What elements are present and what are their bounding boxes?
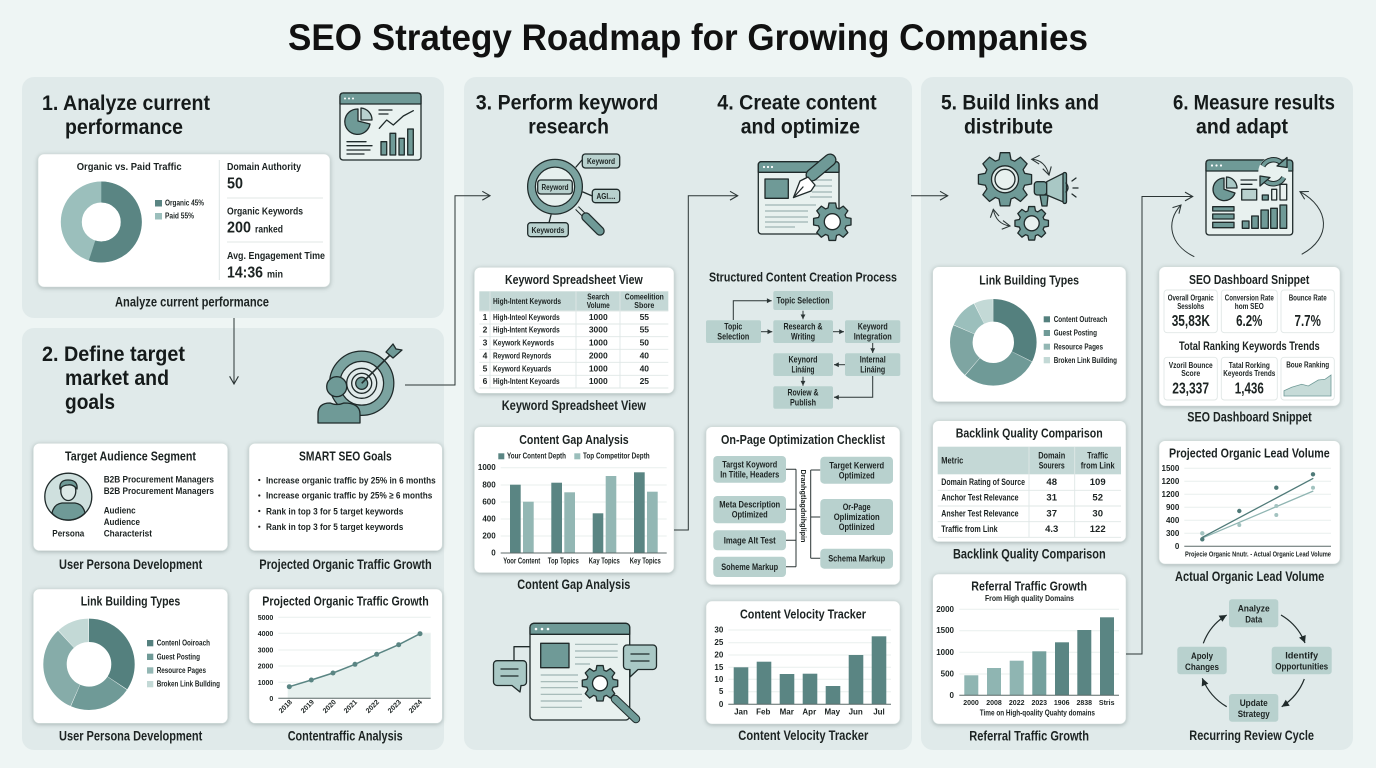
caption: backlink quality comparison: Backlink Quality Comparison	[953, 546, 1106, 561]
diagram: recurring review cycle: Identify	[1285, 651, 1319, 662]
card: keyword spreadsheet table: Comeelition	[625, 291, 664, 301]
card: backlink quality comparison table: Sourers	[1039, 460, 1065, 471]
card: SEO dashboard snippet: Keyeords Trends	[1223, 369, 1276, 378]
heading: step 1: performance	[65, 115, 183, 139]
metrics list: 200	[227, 220, 251, 237]
card: referral traffic growth bar chart	[933, 574, 1126, 724]
arrow: step 1 to step 2	[233, 318, 235, 384]
card: backlink quality comparison table: 122	[1090, 524, 1106, 535]
card: content velocity tracker bar chart: 0	[719, 700, 724, 709]
card: SEO dashboard snippet: 6.2%	[1236, 313, 1263, 330]
caption: content gap analysis: Content Gap Analysis	[517, 577, 630, 592]
card: keyword spreadsheet table: Keyword Spreadsheet View	[505, 272, 643, 287]
card: projected organic lead volume scatter chart: 1200	[1162, 477, 1180, 486]
card: backlink quality comparison table: Anchor Test Relevance	[941, 493, 1019, 504]
icon: magnifier with keyword tags: Keyword	[587, 157, 615, 166]
heading: step 4	[717, 90, 877, 138]
heading: step 5	[941, 90, 1099, 138]
card: SEO dashboard snippet: Total Ranking Keywords Trends	[1179, 339, 1320, 353]
card: link building types donut: Link Building Types	[979, 272, 1079, 287]
card: target audience segment	[33, 443, 228, 551]
card: keyword spreadsheet table: Volume	[587, 300, 610, 310]
card: referral traffic growth bar chart: 1906	[1054, 700, 1070, 707]
card: backlink quality comparison table: 37	[1046, 508, 1057, 519]
legend: link building types	[1044, 315, 1117, 365]
icon: dashboard with refresh cycle	[1172, 157, 1323, 257]
flow: structured content creation process: Selection	[717, 331, 749, 342]
chart: link building donut	[961, 310, 1025, 374]
card: keyword spreadsheet table: 1	[483, 312, 488, 322]
icon: web page with fountain pen and gear	[758, 160, 851, 240]
caption: recurring review cycle: Recurring Review Cycle	[1189, 728, 1314, 743]
legend: organic and paid: Organic 45%	[165, 199, 204, 208]
heading: step 3: research	[528, 114, 609, 138]
legend: link building types: Broken Link Bullding	[157, 680, 220, 689]
arrow: step 4 to step 5	[911, 195, 948, 197]
card: content velocity tracker bar chart: Jul	[873, 707, 885, 716]
heading: step 1	[42, 91, 210, 139]
panel: steps 5 and 6	[921, 77, 1353, 750]
caption: keyword spreadsheet view: Keyword Spreadsheet View	[502, 398, 646, 413]
card: keyword spreadsheet table: High-Intent Keyoards	[493, 376, 560, 386]
card: projected organic traffic growth line chart	[249, 589, 442, 723]
card: projected organic traffic growth line chart: 2023	[387, 699, 403, 715]
card: referral traffic growth bar chart: 2000	[963, 700, 979, 707]
card: content velocity tracker bar chart: Mar	[780, 707, 794, 716]
card: target audience segment: Target Audience Segment	[65, 449, 197, 464]
card: on-page optimization checklist: Or-Page	[843, 502, 871, 513]
legend: organic and paid: Paid 55%	[165, 212, 194, 220]
card: projected organic lead volume scatter chart: 300	[1166, 529, 1180, 538]
card: backlink quality comparison table: Ansher Test Relevance	[941, 508, 1019, 519]
flow: structured content creation process: Writing	[791, 331, 815, 342]
card: keyword spreadsheet table: 40	[640, 363, 649, 373]
card: link building types donut	[33, 589, 228, 723]
flow: structured content creation process: Lináing	[792, 364, 815, 375]
heading: step 5: 5. Build links and	[941, 90, 1099, 114]
card: on-page optimization checklist: Soheme Markup	[721, 562, 778, 573]
caption: projected organic traffic growth: Projected Organic Traffic Growth	[259, 557, 432, 572]
card: content velocity tracker bar chart: Jan	[734, 707, 748, 716]
icon: target with arrow and person	[318, 344, 402, 423]
card: content velocity tracker bar chart: 10	[714, 675, 724, 684]
card: content velocity tracker bar chart: 30	[714, 626, 724, 634]
flow: structured content creation process: Integration	[854, 331, 892, 342]
icon: persona avatar: Persona	[52, 529, 85, 540]
card: keyword spreadsheet table: Keywork Keywords	[493, 338, 554, 348]
card: keyword spreadsheet table: 50	[640, 338, 649, 348]
caption: analyze current performance: Analyze current performance	[115, 295, 269, 310]
card: keyword spreadsheet table: High-Intent Keywords	[493, 325, 560, 335]
card: on-page optimization checklist: Target Kerwerd	[829, 461, 884, 472]
card: projected organic lead volume scatter chart: 0	[1175, 542, 1180, 551]
card: content gap analysis bar chart: 200	[482, 532, 496, 540]
heading: step 6: and adapt	[1196, 114, 1288, 138]
card: projected organic traffic growth line chart: 2000	[258, 664, 273, 670]
card: SEO dashboard snippet: Bounce Rate	[1289, 293, 1327, 302]
panel: step 2 define target market and goals	[22, 328, 444, 750]
card: keyword spreadsheet table: Sbore	[634, 300, 655, 310]
audience text: B2B Procurement Managers	[104, 474, 214, 485]
card: keyword spreadsheet table: 55	[640, 312, 649, 322]
card: content gap analysis bar chart: 400	[482, 514, 496, 524]
card: backlink quality comparison table: 48	[1046, 477, 1057, 488]
card: content gap analysis bar chart: Kay Topics	[589, 557, 620, 566]
card: backlink quality comparison table: 30	[1092, 508, 1103, 519]
legend: link building types: Guest Posting	[1054, 329, 1097, 338]
card: keyword spreadsheet table: 3000	[589, 325, 608, 335]
heading: step 4: and optimize	[741, 114, 860, 138]
metrics list: Avg. Engagement Time	[227, 250, 325, 262]
icon: analytics dashboard window	[340, 93, 421, 160]
audience text	[104, 474, 214, 540]
heading: step 6	[1173, 90, 1335, 138]
heading: step 2	[42, 342, 185, 414]
heading: step 6: 6. Measure results	[1173, 90, 1335, 114]
icon: magnifier with keyword tags	[528, 154, 620, 237]
card: keyword spreadsheet table: 25	[640, 376, 649, 386]
card: projected organic traffic growth line chart: 2019	[300, 699, 316, 715]
caption: referral traffic growth: Referral Traffic Growth	[969, 729, 1089, 744]
flow: structured content creation process: Research &	[784, 321, 823, 332]
arrow: step 3 to step 4	[674, 196, 738, 530]
card: link building types donut	[933, 267, 1126, 402]
card: backlink quality comparison table: from Link	[1081, 460, 1115, 471]
card: organic vs paid traffic and metrics: Organic vs. Paid Traffic	[77, 161, 182, 173]
card: keyword spreadsheet table: 1000	[589, 338, 608, 348]
chart: ranking sparkline	[1284, 375, 1331, 396]
card: referral traffic growth bar chart: 2000	[936, 605, 955, 614]
card: backlink quality comparison table: Traffic	[1087, 450, 1108, 461]
heading: step 4: 4. Create content	[717, 90, 877, 114]
heading: step 2: 2. Define target	[42, 342, 185, 366]
card: content gap analysis bar chart	[474, 427, 674, 573]
card: organic vs paid traffic and metrics	[38, 154, 330, 287]
card: SEO dashboard snippet	[1159, 267, 1340, 406]
card: backlink quality comparison table: Metric	[941, 455, 963, 466]
heading: step 1: 1. Analyze current	[42, 91, 210, 115]
card: keyword spreadsheet table: 6	[483, 376, 488, 386]
icon: magnifier with keyword tags: Reyword	[542, 183, 569, 192]
card: content velocity tracker bar chart: 20	[714, 650, 724, 660]
caption: content traffic analysis: Contentraffic Analysis	[288, 729, 403, 744]
card: referral traffic growth bar chart: Referral Traffic Growth	[971, 579, 1087, 594]
flow: structured content creation process: Structured Content Creation Process	[709, 270, 897, 285]
arrow: step 5 to step 6	[1126, 196, 1193, 654]
card: projected organic lead volume scatter chart: 900	[1166, 503, 1180, 512]
card: referral traffic growth bar chart: 2022	[1009, 700, 1025, 707]
card: content velocity tracker bar chart: Jun	[849, 707, 863, 716]
card: SEO dashboard snippet: 7.7%	[1295, 313, 1321, 330]
card: projected organic traffic growth line chart: 2022	[365, 699, 381, 715]
card: content gap analysis bar chart: Top Competitor Depth	[583, 452, 650, 461]
flow: structured content creation process: Internal	[860, 355, 886, 366]
flow: structured content creation process: Roview &	[788, 388, 819, 399]
flow: structured content creation process: Lináing	[860, 364, 885, 375]
card: keyword spreadsheet table: 2	[483, 325, 488, 335]
card: on-page optimization checklist: Targst Koyword	[722, 459, 777, 470]
card: SEO dashboard snippet: Tatal Rorking	[1229, 361, 1270, 370]
card: projected organic lead volume scatter chart	[1159, 441, 1340, 564]
flow: structured content creation process: Publish	[790, 397, 816, 408]
card: backlink quality comparison table	[933, 421, 1126, 542]
card: SEO dashboard snippet: Conversion Rate	[1225, 293, 1274, 302]
card: SEO dashboard snippet: Boue Ranking	[1286, 360, 1329, 369]
card: projected organic lead volume scatter chart: 1500	[1162, 464, 1180, 473]
card: SEO dashboard snippet: Score	[1181, 369, 1201, 378]
card: content gap analysis bar chart: 600	[482, 498, 496, 506]
card: keyword spreadsheet table: Reyword Reynords	[493, 350, 552, 360]
diagram: recurring review cycle: Changes	[1185, 662, 1219, 673]
card: on-page optimization checklist: In Titile, Headers	[720, 469, 779, 480]
title: SEO Strategy Roadmap for Growing Companies	[288, 17, 1088, 58]
card: SMART SEO goals: Increase organic traffic by 25% in 6 months	[266, 475, 436, 486]
heading: step 3: 3. Perform keyword	[476, 90, 658, 114]
metrics list: 14:36	[227, 264, 263, 281]
card: content velocity tracker bar chart	[706, 601, 900, 724]
panel: step 1 analyze current performance	[22, 77, 444, 318]
card: SEO dashboard snippet: 1,436	[1235, 380, 1264, 397]
card: content gap analysis bar chart: Top Topics	[548, 557, 579, 566]
card: backlink quality comparison table: 31	[1046, 493, 1058, 504]
caption: actual organic lead volume: Actual Organic Lead Volume	[1175, 569, 1325, 584]
card: projected organic traffic growth line chart: 3000	[258, 648, 273, 654]
legend: link building types: Resource Pages	[157, 666, 206, 675]
card: backlink quality comparison table: Domain Rating of Source	[941, 477, 1025, 488]
legend: link building types: Broken Link Building	[1054, 356, 1117, 365]
icon: web page with gear, magnifier and chat bubbles	[494, 623, 656, 720]
card: content velocity tracker bar chart: May	[825, 707, 841, 716]
legend: link building types: Guest Posting	[157, 652, 200, 661]
card: on-page optimization checklist: Optlinized	[839, 522, 875, 533]
caption: user persona development lower: User Persona Development	[59, 729, 203, 744]
metrics list: Domain Authority	[227, 161, 301, 173]
card: keyword spreadsheet table: High-Intent Keywords	[493, 296, 561, 306]
metrics list: min	[267, 268, 283, 280]
flow: structured content creation process	[706, 270, 900, 409]
card: projected organic traffic growth line chart: 4000	[258, 631, 273, 638]
heading: step 2: market and	[65, 366, 169, 390]
card: content gap analysis bar chart: 800	[482, 480, 496, 490]
card: referral traffic growth bar chart: From High quality Domains	[985, 593, 1074, 603]
card: referral traffic growth bar chart: 2008	[986, 700, 1002, 707]
card: keyword spreadsheet table: High-Inteol Keywords	[493, 312, 560, 322]
icon: magnifier with keyword tags: Keywords	[532, 226, 565, 235]
card: content gap analysis bar chart: Content Gap Analysis	[519, 432, 629, 447]
diagram: recurring review cycle: Data	[1245, 615, 1263, 626]
card: referral traffic growth bar chart: 500	[941, 670, 955, 678]
card: SEO dashboard snippet: Sesslohs	[1177, 302, 1205, 311]
diagram: recurring review cycle: Opportunities	[1275, 662, 1328, 673]
card: backlink quality comparison table: 109	[1090, 477, 1106, 488]
card: content gap analysis bar chart: Your Content Depth	[507, 452, 566, 461]
card: on-page optimization checklist: On-Page Optimization Checklist	[721, 432, 886, 447]
card: content gap analysis bar chart: 1000	[478, 463, 496, 472]
flow: structured content creation process: Keyword	[858, 321, 888, 332]
diagram: recurring review cycle: Apoly	[1191, 651, 1214, 662]
card: projected organic lead volume scatter chart: Projecie Organic Nnutr. - Actual Organic Lead Volume	[1185, 552, 1331, 559]
card: keyword spreadsheet table: Search	[587, 291, 609, 301]
card: projected organic traffic growth line chart: 2018	[278, 699, 294, 715]
legend: link building types	[147, 639, 220, 689]
card: SMART SEO goals: Increase organic traffic by 25% ≥ 6 months	[266, 491, 432, 502]
card: SEO dashboard snippet: 23,337	[1172, 380, 1209, 397]
card: referral traffic growth bar chart: Stris	[1099, 700, 1115, 707]
card: projected organic lead volume scatter chart: 400	[1166, 516, 1180, 525]
diagram: recurring review cycle: Update	[1240, 698, 1268, 709]
card: SMART SEO goals: Rank in top 3 for 5 target keywords	[266, 506, 403, 517]
card: projected organic traffic growth line chart: Projected Organic Traffic Growth	[262, 594, 429, 609]
card: backlink quality comparison table: 4.3	[1045, 524, 1058, 535]
card: SMART SEO goals: Rank in top 3 for 5 target keywords	[266, 522, 403, 533]
heading: step 3	[476, 90, 658, 138]
card: projected organic traffic growth line chart: 2020	[322, 699, 338, 715]
flow: structured content creation process: Topic Selection	[776, 295, 830, 306]
card: referral traffic growth bar chart: 1500	[936, 626, 955, 635]
card: projected organic traffic growth line chart: 2021	[343, 699, 359, 715]
card: SEO dashboard snippet: 35,83K	[1172, 313, 1211, 330]
card: content gap analysis bar chart: Key Topics	[630, 557, 661, 566]
card: on-page optimization checklist: Image Alt Test	[724, 535, 776, 546]
diagram: recurring review cycle: Strategy	[1238, 709, 1270, 720]
card: on-page optimization checklist: Schema Markup	[828, 554, 885, 565]
metrics list: 50	[227, 176, 243, 193]
card: referral traffic growth bar chart: 2023	[1032, 700, 1047, 707]
icon: magnifier with keyword tags: AGI....	[596, 192, 616, 201]
card: backlink quality comparison table: 52	[1092, 493, 1103, 504]
icon: persona avatar	[45, 473, 92, 540]
heading: step 5: distribute	[964, 114, 1053, 138]
card: content gap analysis bar chart: Yoor Content	[503, 557, 540, 566]
card: projected organic traffic growth line chart: 5000	[258, 615, 273, 622]
card: projected organic lead volume scatter chart: Projected Organic Lead Volume	[1169, 446, 1330, 461]
card: keyword spreadsheet table: 1000	[589, 376, 608, 386]
card: on-page optimization checklist: Optimized	[839, 471, 875, 482]
card: backlink quality comparison table: Traffic from Link	[941, 524, 998, 535]
card: on-page optimization checklist: Dranhgtlagdnihglipin	[799, 470, 806, 542]
card: keyword spreadsheet table: 1000	[589, 312, 608, 322]
card: referral traffic growth bar chart: 0	[950, 691, 955, 700]
metrics list	[227, 161, 325, 281]
audience text: Audience	[104, 517, 140, 528]
card: content velocity tracker bar chart: Apr	[802, 707, 816, 716]
card: backlink quality comparison table: Backlink Quality Comparison	[956, 426, 1103, 441]
card: content velocity tracker bar chart: 25	[714, 638, 724, 647]
card: referral traffic growth bar chart: 1000	[936, 648, 955, 657]
card: keyword spreadsheet table: 40	[640, 350, 649, 360]
legend: link building types: Contenl Ooiroach	[157, 639, 210, 648]
card: backlink quality comparison table: Domain	[1038, 450, 1065, 461]
card: content gap analysis bar chart: 0	[491, 548, 496, 558]
flow: structured content creation process: Topic	[724, 321, 742, 332]
card: keyword spreadsheet table: 3	[483, 338, 488, 348]
card: keyword spreadsheet table: 1000	[589, 363, 608, 373]
card: SEO dashboard snippet: SEO Dashboard Snippet	[1189, 272, 1310, 287]
card: SEO dashboard snippet: Vzoril Bounce	[1169, 361, 1213, 370]
diagram: recurring review cycle: Analyze	[1238, 604, 1270, 615]
card: on-page optimization checklist: Meta Description	[719, 500, 780, 511]
card: on-page optimization checklist: Oplimization	[834, 512, 880, 523]
card: SEO dashboard snippet: hom SEO	[1235, 302, 1264, 311]
card: SMART SEO goals: SMART SEO Goals	[299, 449, 392, 464]
caption: user persona development: User Persona Development	[59, 557, 203, 572]
card: SEO dashboard snippet: Overall Organic	[1168, 293, 1214, 302]
heading: step 2: goals	[65, 390, 115, 414]
card: referral traffic growth bar chart: 2838	[1077, 700, 1092, 707]
card: projected organic lead volume scatter chart: 1200	[1162, 490, 1180, 499]
audience text: Audienc	[104, 505, 136, 516]
card: link building types donut: Link Building Types	[81, 594, 180, 609]
chart: organic vs paid donut	[71, 192, 131, 252]
legend: link building types: Content Outreach	[1054, 315, 1107, 324]
card: keyword spreadsheet table: Keyword Keyuards	[493, 363, 552, 373]
card: projected organic traffic growth line chart: 1000	[258, 680, 273, 687]
caption: content velocity tracker: Content Velocity Tracker	[738, 728, 869, 743]
icon: gears, megaphone and exchange arrows	[978, 153, 1078, 240]
arrow: step 2 to step 3	[405, 196, 490, 385]
card: keyword spreadsheet table: 55	[640, 325, 649, 335]
card: on-page optimization checklist: Optimized	[732, 510, 768, 521]
caption: SEO dashboard snippet: SEO Dashboard Snippet	[1187, 410, 1312, 425]
card: referral traffic growth bar chart: Time on High-qoality Quahty domains	[980, 709, 1095, 718]
card: content velocity tracker bar chart: 5	[719, 687, 724, 696]
metrics list: Organic Keywords	[227, 205, 303, 217]
diagram: recurring review cycle	[1177, 599, 1332, 722]
card: content velocity tracker bar chart: Feb	[756, 707, 771, 716]
flow: structured content creation process: Keynord	[788, 355, 818, 366]
audience text: Characterist	[104, 529, 153, 540]
card: keyword spreadsheet table: 2000	[589, 350, 608, 360]
audience text: B2B Procurement Managers	[104, 486, 214, 497]
card: projected organic traffic growth line chart: 0	[269, 696, 273, 703]
card: keyword spreadsheet table	[474, 267, 674, 393]
metrics list: ranked	[255, 224, 283, 236]
legend: organic and paid	[155, 199, 204, 220]
card: projected organic traffic growth line chart: 2024	[408, 699, 424, 715]
card: SMART SEO goals	[249, 443, 442, 551]
card: keyword spreadsheet table: 5	[483, 363, 488, 373]
card: keyword spreadsheet table: 4	[483, 350, 488, 360]
legend: link building types: Resource Pages	[1054, 342, 1103, 351]
panel: steps 3 and 4	[464, 77, 912, 750]
chart: link building donut	[55, 630, 123, 698]
card: content velocity tracker bar chart: 15	[714, 663, 724, 672]
card: on-page optimization checklist	[706, 427, 900, 585]
card: content velocity tracker bar chart: Content Velocity Tracker	[740, 606, 866, 621]
